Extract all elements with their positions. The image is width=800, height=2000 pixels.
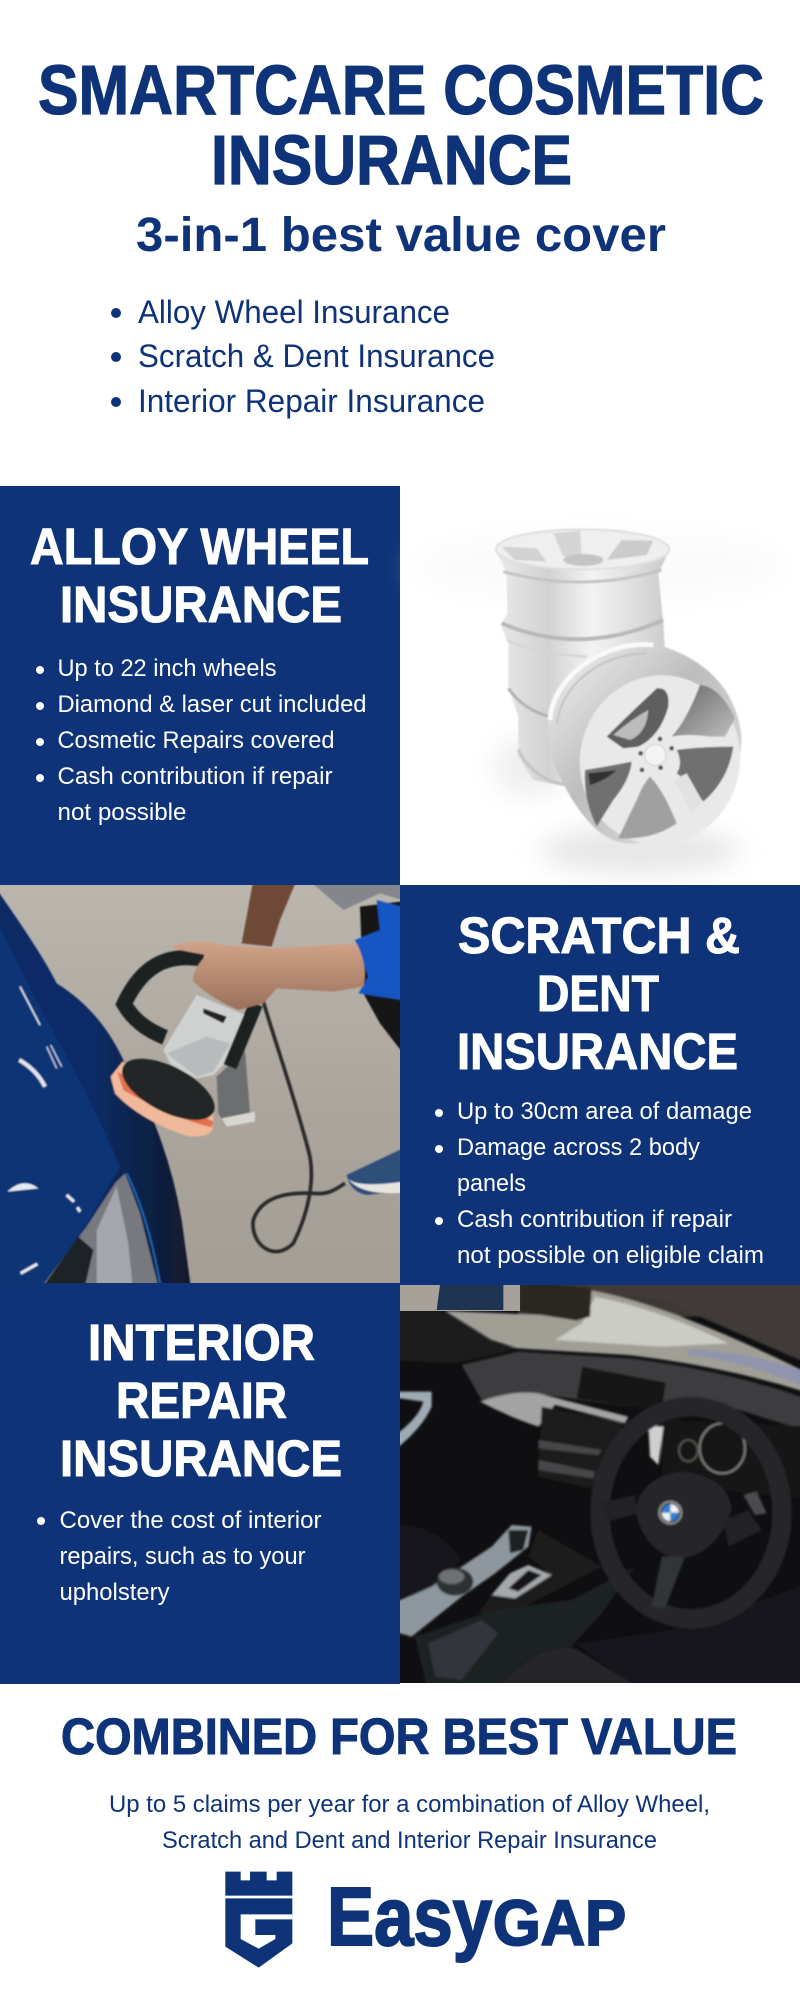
- photo: alloy wheels: [400, 486, 800, 885]
- interior repair bullet list: upholstery: [60, 1579, 170, 1606]
- heading: interior repair insurance: REPAIR: [116, 1372, 287, 1429]
- background figure: [359, 900, 400, 1051]
- left pillar: [388, 1311, 518, 1363]
- scratch and dent bullet list: Up to 30cm area of damage: [457, 1098, 752, 1125]
- polishing pad: [111, 1062, 213, 1137]
- rear stacked wheels: [497, 550, 669, 787]
- wordmark: GAP: [493, 1887, 626, 1959]
- heading: scratch and dent insurance: DENT: [537, 965, 659, 1022]
- wordmark: Easy: [327, 1870, 492, 1963]
- combined value note: Scratch and Dent and Interior Repair Insurance: [162, 1827, 657, 1854]
- post: [217, 1050, 255, 1127]
- windscreen: [445, 1290, 800, 1395]
- interior repair bullet list: [37, 1507, 322, 1606]
- alloy wheel bullet list: not possible: [58, 799, 186, 826]
- centre stack: [538, 1407, 622, 1493]
- heading: scratch and dent insurance: INSURANCE: [457, 1023, 738, 1080]
- alloy wheel bullet list: Diamond & laser cut included: [58, 691, 366, 718]
- forearm and hand: [173, 942, 365, 1010]
- alloy wheel bullet list: Up to 22 inch wheels: [58, 655, 276, 682]
- heading: interior repair insurance: INTERIOR: [88, 1314, 315, 1371]
- scratch and dent bullet list: Damage across 2 body: [457, 1134, 700, 1161]
- shoe: [347, 1143, 413, 1195]
- cord: [253, 1002, 345, 1252]
- alloy wheel bullet list: [36, 655, 366, 826]
- bottom heading: COMBINED FOR BEST VALUE: [61, 1708, 737, 1765]
- headlight chrome: [42, 1172, 158, 1283]
- scratch and dent bullet list: not possible on eligible claim: [457, 1242, 764, 1269]
- polisher: [163, 995, 245, 1078]
- intro bullet list: [111, 294, 495, 419]
- combined value note: [109, 1791, 710, 1854]
- mirror: [520, 1280, 592, 1321]
- front wheel body: [548, 643, 741, 843]
- intro bullet list: Interior Repair Insurance: [138, 383, 485, 419]
- steering wheel: [600, 1407, 782, 1619]
- alloy wheel bullet list: Cash contribution if repair: [58, 763, 333, 790]
- scratch and dent bullet list: Cash contribution if repair: [457, 1206, 732, 1233]
- heading: interior repair insurance: INSURANCE: [60, 1430, 342, 1487]
- BMW badge: [659, 1502, 681, 1524]
- heading: alloy wheel insurance: [30, 518, 369, 633]
- car body: [0, 880, 192, 1293]
- roof lining: [517, 1285, 698, 1318]
- intro bullet list: Alloy Wheel Insurance: [138, 294, 450, 330]
- heading: scratch and dent insurance: SCRATCH &: [458, 907, 740, 964]
- title: [38, 51, 764, 199]
- panel: alloy wheel insurance: [0, 486, 400, 885]
- heading: alloy wheel insurance: INSURANCE: [60, 576, 342, 633]
- floor mat: [579, 1587, 800, 1683]
- panel: interior repair insurance: [0, 1283, 400, 1684]
- handle: [124, 958, 203, 1037]
- interior repair bullet list: repairs, such as to your: [60, 1543, 306, 1570]
- strip of previous photo: [399, 1285, 520, 1311]
- door trim: [400, 1390, 434, 1448]
- scratch and dent bullet list: panels: [457, 1170, 526, 1197]
- icon: castle shield: [225, 1872, 292, 1968]
- infotainment screen: [577, 1367, 666, 1412]
- heading: scratch and dent insurance: [457, 907, 740, 1080]
- scratch and dent bullet list: [435, 1098, 764, 1269]
- photo: polishing a blue car: [0, 880, 413, 1293]
- title: INSURANCE: [211, 121, 572, 199]
- alloy wheel bullet list: Cosmetic Repairs covered: [58, 727, 334, 754]
- front wheel face: [564, 660, 756, 860]
- subtitle: 3-in-1 best value cover: [136, 209, 666, 262]
- instrument binnacle: [662, 1420, 800, 1500]
- intro bullet list: Scratch & Dent Insurance: [138, 338, 495, 374]
- logo: EasyGAP: [225, 1870, 626, 1968]
- wordmark: [327, 1870, 626, 1963]
- dash top: [462, 1352, 800, 1433]
- seat and console: [388, 1523, 462, 1600]
- panel: scratch and dent insurance: [400, 885, 800, 1285]
- photo: car interior: [388, 1273, 800, 1693]
- interior repair bullet list: Cover the cost of interior: [60, 1507, 322, 1534]
- heading: interior repair insurance: [60, 1314, 342, 1487]
- heading: alloy wheel insurance: ALLOY WHEEL: [30, 518, 369, 575]
- combined value note: Up to 5 claims per year for a combination of Alloy Wheel,: [109, 1791, 710, 1818]
